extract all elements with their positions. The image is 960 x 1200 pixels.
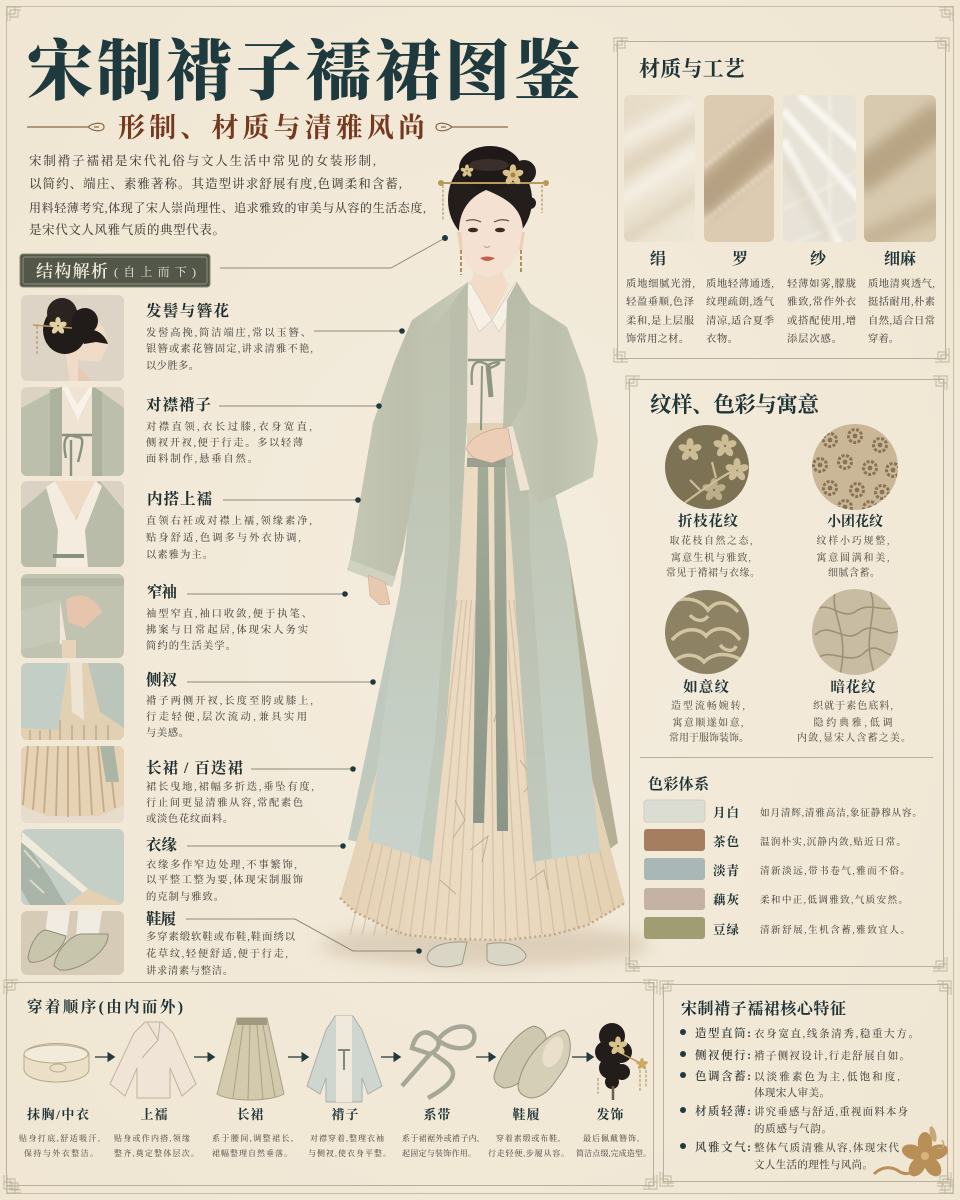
- fabric names: 罗: [732, 250, 748, 268]
- right sleeve: [510, 303, 598, 503]
- pattern text: sprig: 寓意生机与雅致,: [671, 551, 751, 564]
- step 1: undergarment: [19, 1044, 100, 1158]
- shoes: [427, 942, 526, 967]
- intro text: [29, 153, 426, 237]
- panel: dressing order: [4, 980, 657, 1189]
- silk text: 柔和,是上层服: [626, 314, 695, 327]
- pattern text: dark flower: 暗花纹: [830, 678, 876, 696]
- gauze text: 或搭配使用,增: [787, 314, 856, 327]
- step 4: beizi: [307, 1016, 391, 1158]
- ramie text: 自然,适合日常: [868, 314, 935, 327]
- pattern text: ruyi: 造型流畅婉转,: [671, 699, 745, 712]
- pattern: sprig flower: [665, 425, 749, 509]
- callout: skirt: 裙长曳地,裙幅多折迭,垂坠有度,: [146, 780, 314, 793]
- step 1: undergarment: 抹胸/中衣: [27, 1107, 89, 1122]
- pattern text: round: 小团花纹: [827, 513, 883, 530]
- step 4: beizi: 与侧衩,使衣身平整。: [308, 1148, 391, 1158]
- gauze text: 轻薄如雾,朦胧: [787, 277, 856, 290]
- colour: pale cyan: 清新淡远,带书卷气,雅而不俗。: [760, 865, 910, 877]
- callout: inner top: [146, 489, 361, 561]
- heading: colour system: 色彩体系: [648, 775, 710, 793]
- pattern text: round: [816, 513, 890, 579]
- part 6: skirt thumbnail: [21, 746, 124, 823]
- ramie text: 质地清爽透气,: [868, 277, 935, 290]
- callout: side slit: 与美感。: [146, 726, 189, 739]
- colour: tea: [644, 829, 906, 851]
- subtitle with ornaments: [27, 112, 508, 143]
- silk text: 质地细腻光滑,: [626, 277, 695, 290]
- step 1: undergarment: 保持与外衣整洁。: [24, 1148, 98, 1158]
- callout: hair: 发髻高挽,简洁端庄,常以玉簪、: [146, 326, 311, 339]
- neck: [470, 262, 508, 318]
- step 4: beizi: 对襟穿着,整理衣袖: [310, 1133, 384, 1143]
- feature 2: [680, 1048, 910, 1062]
- step 5: ribbon: 系于裙裾外或褙子内,: [402, 1133, 479, 1143]
- pattern text: sprig: 折枝花纹: [678, 512, 738, 530]
- callout: sleeve: 袖型窄直,袖口收敛,便于执笔、: [146, 607, 312, 620]
- pattern text: ruyi: 寓意顺遂如意,: [672, 716, 744, 729]
- callout: skirt: 长裙 / 百迭裙: [146, 759, 243, 777]
- step 6: shoes: 行走轻便,步履从容。: [488, 1148, 569, 1158]
- callout: side slit: 侧衩: [146, 671, 177, 689]
- pattern: dark flower: [810, 587, 900, 677]
- step 6: shoes: [488, 1026, 570, 1158]
- feature 1: 造型直筒:: [695, 1026, 751, 1040]
- callout: shoes: 讲求清素与整洁。: [146, 964, 233, 977]
- callout: beizi: [146, 395, 382, 465]
- fabric: luo: [704, 95, 774, 242]
- silk text: 轻盈垂顺,色泽: [626, 295, 694, 308]
- inner top: [467, 288, 508, 467]
- feature 5: [680, 1140, 900, 1171]
- fabric names: 纱: [810, 249, 828, 268]
- feature 1: [680, 1026, 919, 1040]
- intro text: 用料轻薄考究,体现了宋人崇尚理性、追求雅致的审美与从容的生活态度,: [29, 200, 426, 215]
- callout: sleeve: 窄袖: [147, 583, 177, 601]
- luo text: 清凉,适合夏季: [706, 314, 775, 327]
- step 7: hair ornament: 简洁点缀,完成造型。: [576, 1148, 651, 1158]
- fabric names: [650, 249, 916, 268]
- step 5: ribbon: 系带: [424, 1107, 450, 1122]
- ground shadow: [320, 923, 650, 967]
- left robe panel: [368, 282, 468, 862]
- callout: sleeve: 拂案与日常起居,体现宋人务实: [146, 623, 309, 636]
- intro text: 以简约、端庄、素雅著称。其造型讲求舒展有度,色调柔和含蓄,: [29, 176, 402, 191]
- icon: flower ornament: [874, 1125, 950, 1180]
- arrows: [95, 1056, 593, 1058]
- title: 宋制褙子襦裙图鉴: [27, 36, 580, 109]
- callout: hair: 发髻与簪花: [146, 301, 229, 320]
- callout: hair: 银簪或素花簪固定,讲求清雅不艳,: [146, 342, 313, 355]
- intro text: 是宋代文人风雅气质的典型代表。: [29, 222, 225, 237]
- section badge: structure: [20, 254, 210, 287]
- part 7: hem thumbnail: [21, 829, 124, 905]
- part 3: inner top thumbnail: [21, 481, 124, 567]
- step 7: hair ornament: 最后佩戴簪饰,: [583, 1133, 639, 1143]
- feature 2: 侧衩便行:: [695, 1048, 751, 1062]
- callout: hair: [146, 301, 405, 372]
- callout: shoes: 多穿素缎软鞋或布鞋,鞋面绣以: [146, 930, 296, 943]
- face details: [466, 220, 509, 261]
- callout: sleeve: 简约的生活美学。: [146, 639, 236, 652]
- hairpin: [438, 164, 549, 220]
- back layers: [348, 590, 412, 843]
- step 2: upper garment: 上襦: [140, 1107, 168, 1122]
- silk text: 饰常用之材。: [626, 332, 689, 345]
- luo text: 衣物。: [706, 332, 738, 345]
- feature 3: 体现宋人审美。: [754, 1086, 830, 1099]
- heading: order: 穿着顺序(由内而外): [27, 997, 183, 1016]
- pattern text: sprig: 取花枝自然之态,: [670, 534, 752, 547]
- colour: pale cyan: [644, 858, 910, 880]
- callout: beizi: 对襟褙子: [146, 395, 211, 414]
- left sleeve: [347, 282, 468, 587]
- colour: lotus grey: 藕灰: [713, 892, 739, 907]
- head: [438, 146, 549, 277]
- feature 3: 色调含蓄:: [695, 1069, 751, 1083]
- feature 4: 讲究垂感与舒适,重视面料本身: [754, 1105, 908, 1118]
- gauze text: 添层次感。: [787, 332, 842, 345]
- colour: moon white: [644, 800, 922, 822]
- pattern text: dark flower: 织就于素色底料,: [813, 699, 893, 712]
- step 2: upper garment: 贴身或作内搭,领缘: [114, 1133, 190, 1143]
- callout: hem: 以平整工整为要,体现宋制服饰: [146, 873, 304, 886]
- colour: pale cyan: 淡青: [713, 863, 739, 878]
- callout: side slit: [146, 671, 376, 739]
- heading: materials: 材质与工艺: [639, 57, 745, 81]
- callout: skirt: [146, 759, 356, 825]
- step 3: skirt: 系于腰间,调整裙长,: [212, 1133, 293, 1143]
- heading: patterns: 纹样、色彩与寓意: [650, 392, 820, 417]
- pattern text: round: 细腻含蓄。: [828, 566, 880, 579]
- feature 4: 材质轻薄:: [695, 1104, 751, 1118]
- skirt: [340, 460, 625, 940]
- panel: materials: [614, 38, 949, 362]
- hands at waist: [466, 428, 513, 463]
- part 1: hair thumbnail: [21, 295, 124, 381]
- callout: hem: 衣缘多作窄边处理,不事繁饰,: [146, 858, 297, 871]
- feature 5: 文人生活的理性与风尚。: [754, 1158, 873, 1171]
- pattern text: dark flower: [797, 678, 911, 744]
- step 7: hair ornament: [576, 1023, 651, 1158]
- step 1: undergarment: 贴身打底,舒适吸汗,: [19, 1133, 100, 1143]
- pattern text: dark flower: 隐约典雅,低调: [814, 716, 892, 729]
- callout: sleeve: [146, 583, 348, 652]
- pattern text: ruyi: [669, 678, 749, 744]
- step 6: shoes: 穿着素缎或布鞋,: [496, 1133, 560, 1143]
- subtitle with ornaments: 形制、材质与清雅风尚: [118, 112, 425, 143]
- pattern text: ruyi: 如意纹: [683, 678, 730, 696]
- part 5: slit thumbnail: [21, 663, 124, 740]
- colour: tea: 温润朴实,沉静内敛,贴近日常。: [760, 836, 906, 848]
- feature 5: 风雅文气:: [695, 1140, 751, 1154]
- step 2: upper garment: [110, 1022, 199, 1158]
- part 2: beizi thumbnail: [21, 387, 124, 476]
- colour: tea: 茶色: [713, 834, 739, 849]
- colour: bean green: [644, 917, 910, 939]
- feature 4: [680, 1104, 908, 1135]
- callout: beizi: 侧衩开衩,便于行走。多以轻薄: [146, 436, 304, 449]
- step 3: skirt: [212, 1018, 293, 1158]
- callout: shoes: [146, 909, 422, 977]
- pattern text: dark flower: 内敛,显宋人含蓄之美。: [797, 731, 911, 744]
- ribbon bow: [468, 360, 507, 430]
- left hand: [368, 575, 390, 605]
- ramie text: 挺括耐用,朴素: [868, 295, 935, 308]
- sash tails: [473, 460, 508, 831]
- callout: shoes: 花草纹,轻便舒适,便于行走,: [146, 947, 288, 960]
- luo text: [706, 277, 775, 345]
- feature 3: [680, 1069, 900, 1099]
- step 7: hair ornament: 发饰: [596, 1107, 624, 1122]
- figure: woman in Song dress: [320, 146, 650, 967]
- pattern text: ruyi: 常用于服饰装饰。: [669, 731, 749, 744]
- callout: inner top: 以素雅为主。: [146, 548, 213, 561]
- fabric: ramie: [864, 95, 936, 242]
- gauze text: 雅致,常作外衣: [787, 295, 857, 308]
- pattern: small round flower: [812, 424, 898, 510]
- ramie text: 穿着。: [868, 332, 899, 345]
- gauze text: [787, 277, 857, 345]
- callout: beizi: 面料制作,悬垂自然。: [146, 452, 258, 465]
- part 8: shoes thumbnail: [21, 911, 124, 975]
- collar: [462, 282, 519, 332]
- colour: lotus grey: 柔和中正,低调雅致,气质安然。: [760, 894, 908, 906]
- panel: core features: [660, 981, 951, 1186]
- colour: moon white: 月白: [713, 805, 739, 820]
- earrings: [461, 250, 521, 275]
- step 3: skirt: 裙幅整理自然垂落。: [212, 1148, 292, 1158]
- section badge: structure: (自上而下): [114, 264, 196, 279]
- step 2: upper garment: 整齐,奠定整体层次。: [114, 1148, 199, 1158]
- ramie text: [868, 277, 935, 345]
- callout: side slit: 行走轻便,层次流动,兼具实用: [146, 710, 307, 723]
- callout: beizi: 对襟直领,衣长过膝,衣身宽直,: [146, 420, 312, 433]
- feature 1: 衣身宽直,线条清秀,稳重大方。: [754, 1027, 919, 1040]
- fabric: gauze: [783, 95, 860, 245]
- callout: hem: [146, 836, 346, 903]
- callout: hem: 的克制与雅致。: [146, 890, 224, 903]
- callout: shoes: 鞋履: [146, 909, 176, 928]
- feature 4: 的质感与气韵。: [754, 1122, 832, 1135]
- feature 2: 褙子侧衩设计,行走舒展自如。: [754, 1049, 910, 1062]
- pattern text: sprig: 常见于褙裙与衣缘。: [666, 566, 760, 579]
- callout: hem: 衣缘: [146, 836, 177, 854]
- callout: hair: 以少胜多。: [146, 359, 199, 372]
- callout: side slit: 褙子两侧开衩,长度至胯或膝上,: [146, 694, 313, 707]
- step 4: beizi: 褙子: [332, 1107, 358, 1122]
- step 3: skirt: 长裙: [236, 1107, 264, 1122]
- callout: inner top: 直领右衽或对襟上襦,领缘素净,: [146, 514, 312, 527]
- part 4: sleeve thumbnail: [21, 574, 124, 658]
- step 5: ribbon: 起固定与装饰作用。: [402, 1148, 476, 1158]
- fabric names: 细麻: [884, 250, 916, 268]
- feature 3: 以淡雅素色为主,低饱和度,: [754, 1070, 900, 1083]
- pattern text: round: 纹样小巧规整,: [816, 534, 890, 547]
- luo text: 纹理疏朗,透气: [706, 295, 775, 308]
- silk text: [626, 277, 695, 345]
- colour: moon white: 如月清辉,清雅高洁,象征静穆从容。: [760, 807, 922, 819]
- colour: bean green: 豆绿: [713, 922, 739, 937]
- fabric: silk: [624, 95, 695, 242]
- callout: skirt: 行止间更显清雅从容,常配素色: [146, 796, 303, 809]
- heading: features: 宋制褙子襦裙核心特征: [681, 999, 846, 1018]
- callout: skirt: 或淡色花纹面料。: [146, 812, 233, 825]
- luo text: 质地轻薄通透,: [706, 277, 774, 290]
- colour: bean green: 清新舒展,生机含蓄,雅致宜人。: [760, 924, 910, 936]
- right robe panel: [503, 282, 600, 862]
- pattern text: round: 寓意圆满和美,: [816, 551, 890, 564]
- fabric names: 绢: [650, 250, 666, 268]
- leader: structure to head: [220, 235, 448, 268]
- pattern: ruyi cloud: [665, 590, 749, 674]
- callout: inner top: 内搭上襦: [147, 489, 212, 508]
- step 5: ribbon: [402, 1026, 479, 1158]
- panel: patterns and colours: [626, 376, 947, 971]
- step 6: shoes: 鞋履: [512, 1107, 540, 1122]
- colour: lotus grey: [644, 888, 908, 910]
- intro text: 宋制褙子襦裙是宋代礼俗与文人生活中常见的女装形制,: [29, 153, 376, 168]
- pattern text: sprig: [666, 512, 760, 579]
- section badge: structure: 结构解析: [36, 261, 108, 281]
- feature 5: 整体气质清雅从容,体现宋代: [754, 1141, 900, 1154]
- callout: inner top: 贴身舒适,色调多与外衣协调,: [146, 531, 301, 544]
